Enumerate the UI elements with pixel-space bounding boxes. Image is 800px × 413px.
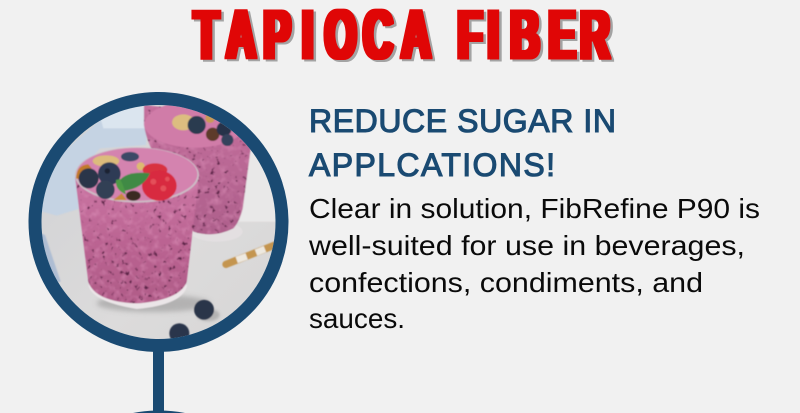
heading: APPLCATIONS! — [309, 147, 555, 183]
photo detail: blue cloth — [37, 103, 148, 216]
photo detail: raspberries — [143, 163, 167, 177]
photo detail: mint leaf — [117, 173, 150, 191]
ring — [35, 98, 282, 346]
photo detail: front glass shadow — [97, 295, 210, 312]
photo detail: lower cloth — [42, 234, 61, 282]
body text: sauces. — [309, 303, 405, 334]
photo detail: back glass — [144, 101, 251, 242]
photo detail: blueberries — [79, 168, 99, 188]
body text: well-suited for use in beverages, — [308, 230, 745, 261]
photo detail: nuts and granola — [76, 164, 92, 180]
photo detail: front glass — [75, 147, 199, 309]
photo: berry smoothie glasses — [42, 105, 276, 339]
photo detail: table highlight — [238, 150, 276, 222]
body text: confections, condiments, and — [309, 267, 703, 298]
heading — [309, 103, 616, 183]
body text: Clear in solution, FibRefine P90 is — [309, 193, 760, 224]
heading: REDUCE SUGAR IN — [309, 103, 616, 139]
body text — [308, 193, 760, 334]
lower circle top — [133, 410, 185, 413]
stem — [153, 350, 164, 413]
photo detail: straw — [226, 244, 277, 264]
photo detail: loose blueberries — [169, 300, 220, 343]
